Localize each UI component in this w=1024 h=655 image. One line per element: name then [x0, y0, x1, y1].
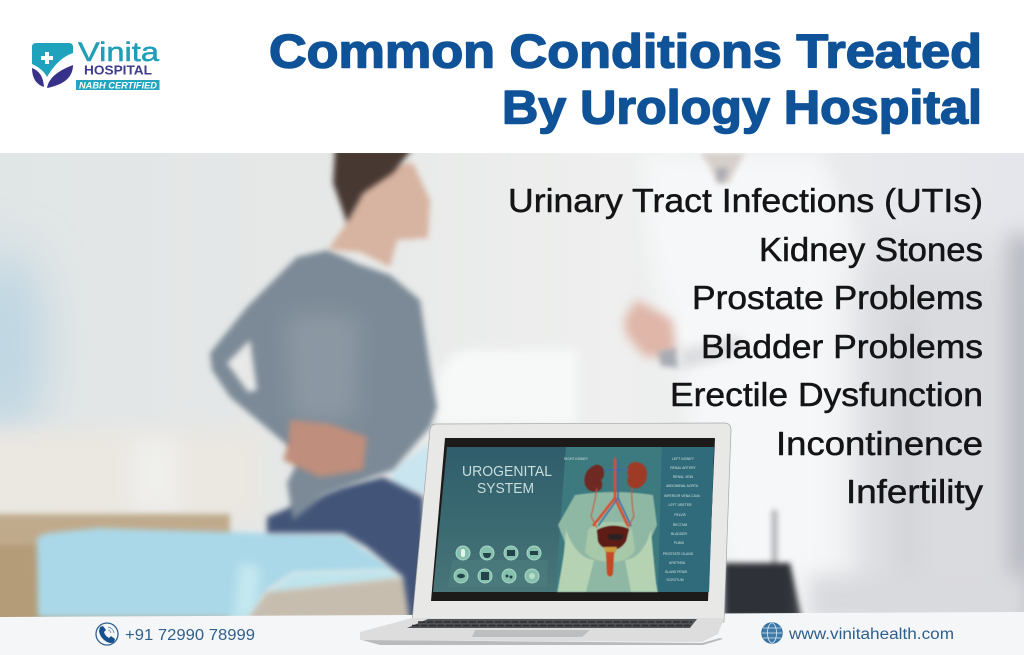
icon: phone — [96, 623, 118, 645]
screen label text: RENAL ARTERY — [670, 466, 697, 470]
logo shield icon — [32, 43, 73, 88]
list of conditions: Prostate Problems — [692, 279, 983, 316]
urinary organs — [584, 458, 647, 576]
screen label text: ABDOMINAL AORTA — [666, 484, 699, 488]
screen heading: UROGENITAL — [462, 463, 552, 480]
screen label text: SCROTUM — [666, 578, 684, 582]
icon backdrop panel — [448, 560, 548, 587]
sweater — [210, 250, 437, 520]
list of conditions: Bladder Problems — [701, 328, 983, 365]
screen label text: PUBIS — [674, 541, 685, 545]
website contact — [762, 623, 954, 643]
neck and face — [328, 163, 430, 267]
screen label text: INFERIOR VENA CAVA — [664, 494, 701, 498]
laptop lid — [412, 423, 731, 622]
screen label text: PROSTATE GLAND — [663, 552, 694, 556]
list of conditions: Erectile Dysfunction — [670, 376, 983, 413]
website address: www.vinitahealth.com — [788, 626, 954, 643]
screen heading — [462, 463, 552, 497]
screen label text: GLANS PENIS — [665, 570, 688, 574]
screen label text — [564, 457, 701, 582]
list of conditions: Incontinence — [776, 425, 983, 462]
footer strip — [0, 612, 1024, 655]
screen label text: PELVIS — [674, 513, 687, 517]
laptop shadow — [362, 638, 723, 645]
title: By Urology Hospital — [502, 80, 982, 134]
laptop — [360, 423, 731, 645]
logo subtitle: HOSPITAL — [84, 62, 152, 78]
laptop screen — [431, 438, 715, 601]
background photo — [0, 148, 1024, 635]
trousers — [267, 477, 428, 622]
screen icon glyphs — [457, 549, 538, 580]
list of conditions: Kidney Stones — [759, 231, 983, 268]
cloth — [37, 528, 393, 617]
anatomy panel — [555, 447, 662, 592]
screen icons — [454, 546, 541, 583]
hair — [333, 148, 413, 223]
laptop base and keyboard — [360, 618, 724, 642]
screen label text: RENAL VEIN — [673, 475, 694, 479]
screen label text: RIGHT KIDNEY — [564, 457, 589, 461]
screen label text: BLADDER — [671, 532, 688, 536]
icon: globe — [762, 623, 782, 643]
phone contact — [96, 623, 255, 645]
wall tint and sofa — [0, 250, 577, 635]
list of conditions: Urinary Tract Infections (UTIs) — [508, 182, 983, 219]
screen label text: RECTUM — [673, 523, 687, 527]
list of conditions: Infertility — [846, 473, 984, 510]
screen label text: LEFT URETER — [668, 503, 692, 507]
hands — [283, 420, 367, 477]
logo name: Vinita — [78, 37, 160, 67]
title — [269, 24, 982, 134]
accreditation badge: NABH CERTIFIED — [79, 80, 158, 90]
phone number: +91 72990 78999 — [125, 627, 255, 644]
blurred patient — [37, 148, 437, 622]
title: Common Conditions Treated — [269, 24, 982, 78]
screen heading: SYSTEM — [477, 480, 534, 497]
screen label text: URETHRA — [669, 561, 686, 565]
pelvis illustration — [557, 492, 658, 592]
list of conditions — [508, 182, 984, 510]
doctor in white coat — [624, 153, 1024, 630]
logo — [32, 37, 160, 90]
screen label text: LEFT KIDNEY — [672, 457, 695, 461]
wall — [0, 153, 1024, 618]
